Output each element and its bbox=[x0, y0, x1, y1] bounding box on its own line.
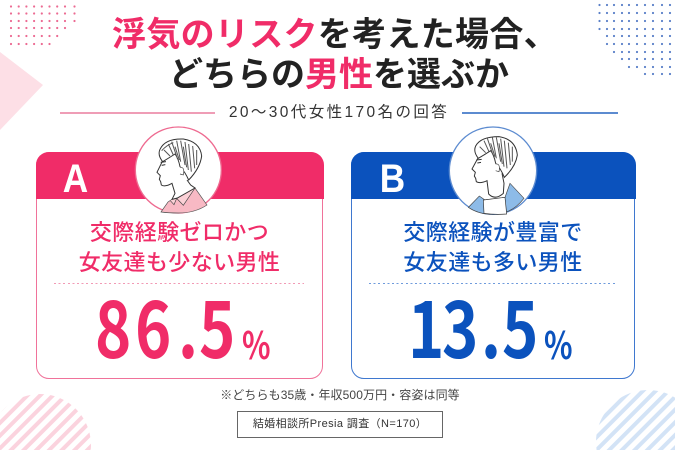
percentage B: 5 bbox=[502, 270, 538, 381]
title bbox=[112, 16, 558, 94]
panel: option A bbox=[36, 152, 323, 379]
icon: man A portrait bbox=[134, 126, 222, 214]
percentage A: 6 bbox=[135, 270, 171, 381]
percentage B: . bbox=[480, 270, 501, 381]
source box bbox=[237, 411, 443, 438]
subtitle with rules: 20～30代女性170名の回答 bbox=[229, 104, 449, 121]
footnote: ※どちらも35歳・年収500万円・容姿は同等 bbox=[220, 388, 460, 402]
header band B bbox=[350, 152, 636, 198]
icon: man B portrait bbox=[448, 126, 538, 215]
percentage B: 1 bbox=[408, 270, 444, 381]
header band A bbox=[36, 152, 324, 198]
letter B: B bbox=[380, 157, 405, 201]
title: 浮気のリスクを考えた場合、 bbox=[112, 16, 558, 54]
percentage B: % bbox=[544, 315, 572, 370]
letter A: A bbox=[63, 157, 88, 201]
description A: 交際経験ゼロかつ bbox=[90, 220, 269, 245]
title: どちらの男性を選ぶか bbox=[169, 56, 509, 94]
description B: 女友達も多い男性 bbox=[403, 250, 583, 275]
description B: 交際経験が豊富で bbox=[403, 220, 583, 245]
percentage B bbox=[408, 270, 572, 381]
description A bbox=[79, 220, 280, 275]
percentage B: 3 bbox=[442, 270, 478, 381]
percentage A: . bbox=[178, 270, 198, 381]
percentage A: 5 bbox=[199, 270, 235, 381]
source box: 結婚相談所Presia 調査（N=170） bbox=[253, 418, 427, 430]
percentage A: 8 bbox=[95, 270, 131, 381]
panel: option B bbox=[351, 152, 635, 379]
percentage A bbox=[95, 270, 270, 381]
description A: 女友達も少ない男性 bbox=[79, 250, 280, 275]
description B bbox=[403, 220, 583, 275]
percentage A: % bbox=[242, 315, 270, 370]
